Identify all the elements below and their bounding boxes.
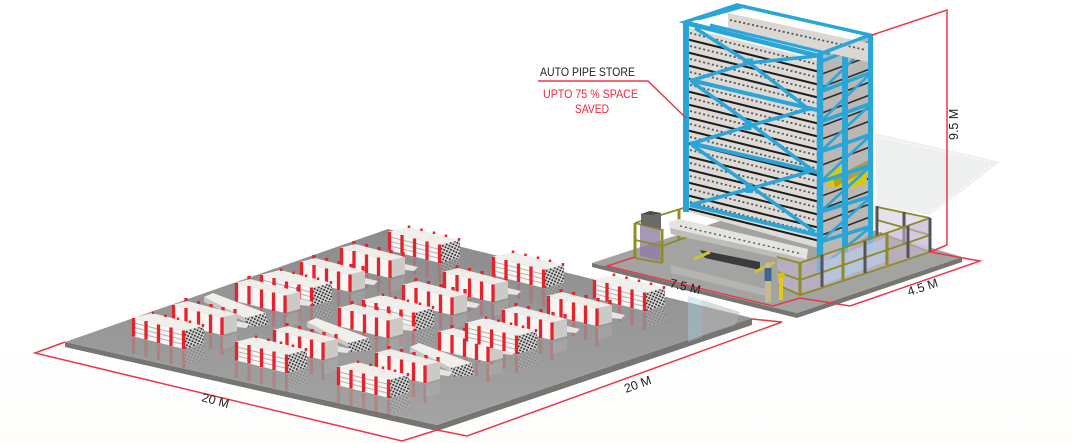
leader line for label [538,81,686,118]
top rear shelf [728,13,868,62]
yellow operator pedestal [777,272,785,300]
callout title: AUTO PIPE STORE [540,65,635,79]
loading conveyor with pipes [669,219,808,272]
shuttle rack tower [685,5,872,275]
rear and left safety fence [635,206,930,263]
right side bay [819,35,872,275]
dimension: big floor 20 M right [437,319,782,436]
label: 9.5 M: 9.5 M [947,109,961,140]
tower shadow on backdrop [875,133,1000,215]
blue base inside fence [822,238,885,285]
pipe bundle reflections [134,252,665,417]
dimension: big floor 20 M left [35,342,437,441]
control cabinet [641,211,661,229]
label: 4.5 M: 4.5 M [906,276,940,299]
label: 20 M left: 20 M [200,390,231,411]
panel: auto pipe store platform [592,5,962,318]
front shelves [688,28,818,248]
dimension: tower height 9.5 M [872,10,947,252]
pipe bundles [132,226,665,398]
label: 7.5 M: 7.5 M [668,276,702,297]
panel: conventional pipe storage floor [65,226,752,431]
platform slab [592,202,962,318]
blue front frame and X-bracing [685,5,870,272]
dimension: platform 7.5 M [607,257,800,306]
callout red line two: SAVED [575,102,609,116]
front safety fence [777,218,930,295]
dimension: platform 4.5 M [800,252,980,306]
dimension labels [200,109,961,411]
icon: operator figure [764,262,772,302]
label: 20 M right: 20 M [622,373,653,396]
callout red line one: UPTO 75 % SPACE [543,87,638,101]
callout: auto pipe store [540,65,638,116]
floor slab [65,229,752,431]
